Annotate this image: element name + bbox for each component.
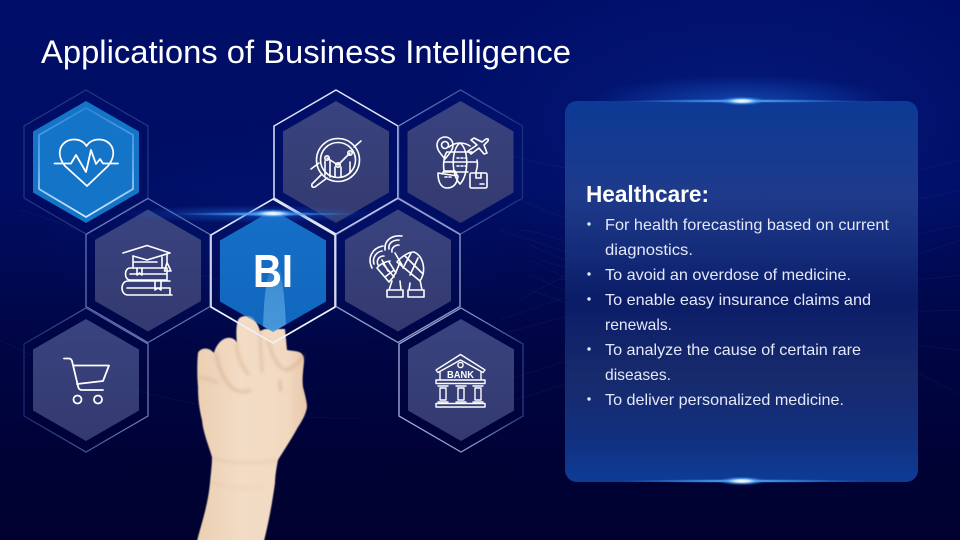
hexagon: healthcare [24,90,148,234]
hexagon lower outline over hand [211,307,335,343]
BI label: BI [253,245,293,297]
card top glow [617,96,867,106]
bullet list: For health forecasting based on current [605,217,890,234]
icon: bank building: BANK [447,369,474,381]
index finger through screen [263,268,286,332]
icon: satellite dishes [370,236,424,297]
card heading: Healthcare: [586,181,709,207]
hand pointing [197,210,335,540]
bullet list: To enable easy insurance claims and [605,292,871,309]
card top halo [592,75,892,127]
bullet list: diagnostics. [605,242,693,259]
bullet list: diseases. [605,367,671,384]
fingertip tint behind screen [232,221,317,332]
hexagon: logistics [398,90,522,234]
hexagon: analytics [274,90,398,234]
card background [565,101,918,482]
panel: healthcare details [565,75,918,482]
hexagon: retail [24,308,148,452]
hand shading [199,332,303,488]
bullet list: To deliver personalized medicine. [605,392,844,409]
bullet list: To avoid an overdose of medicine. [605,267,851,284]
icon: graduation cap on books [122,246,172,295]
title: Applications of Business Intelligence [41,34,571,70]
BI top glow [120,205,380,223]
icon: magnifier with chart [311,138,361,187]
hexagon: education [86,198,210,342]
bullet list [587,217,890,409]
icon: heart with pulse [54,140,118,186]
hexagon: BI centre [211,199,335,343]
icon: bank building [436,354,485,407]
bullet list: renewals. [605,317,672,334]
hexagon: satellite [336,198,460,342]
icon: globe with pin plane box and ship [437,137,488,188]
card bottom glow [617,476,867,486]
hand [197,316,307,540]
icon: shopping cart [64,358,109,404]
bullet list: To analyze the cause of certain rare [605,342,861,359]
hexagon: banking [399,308,523,452]
